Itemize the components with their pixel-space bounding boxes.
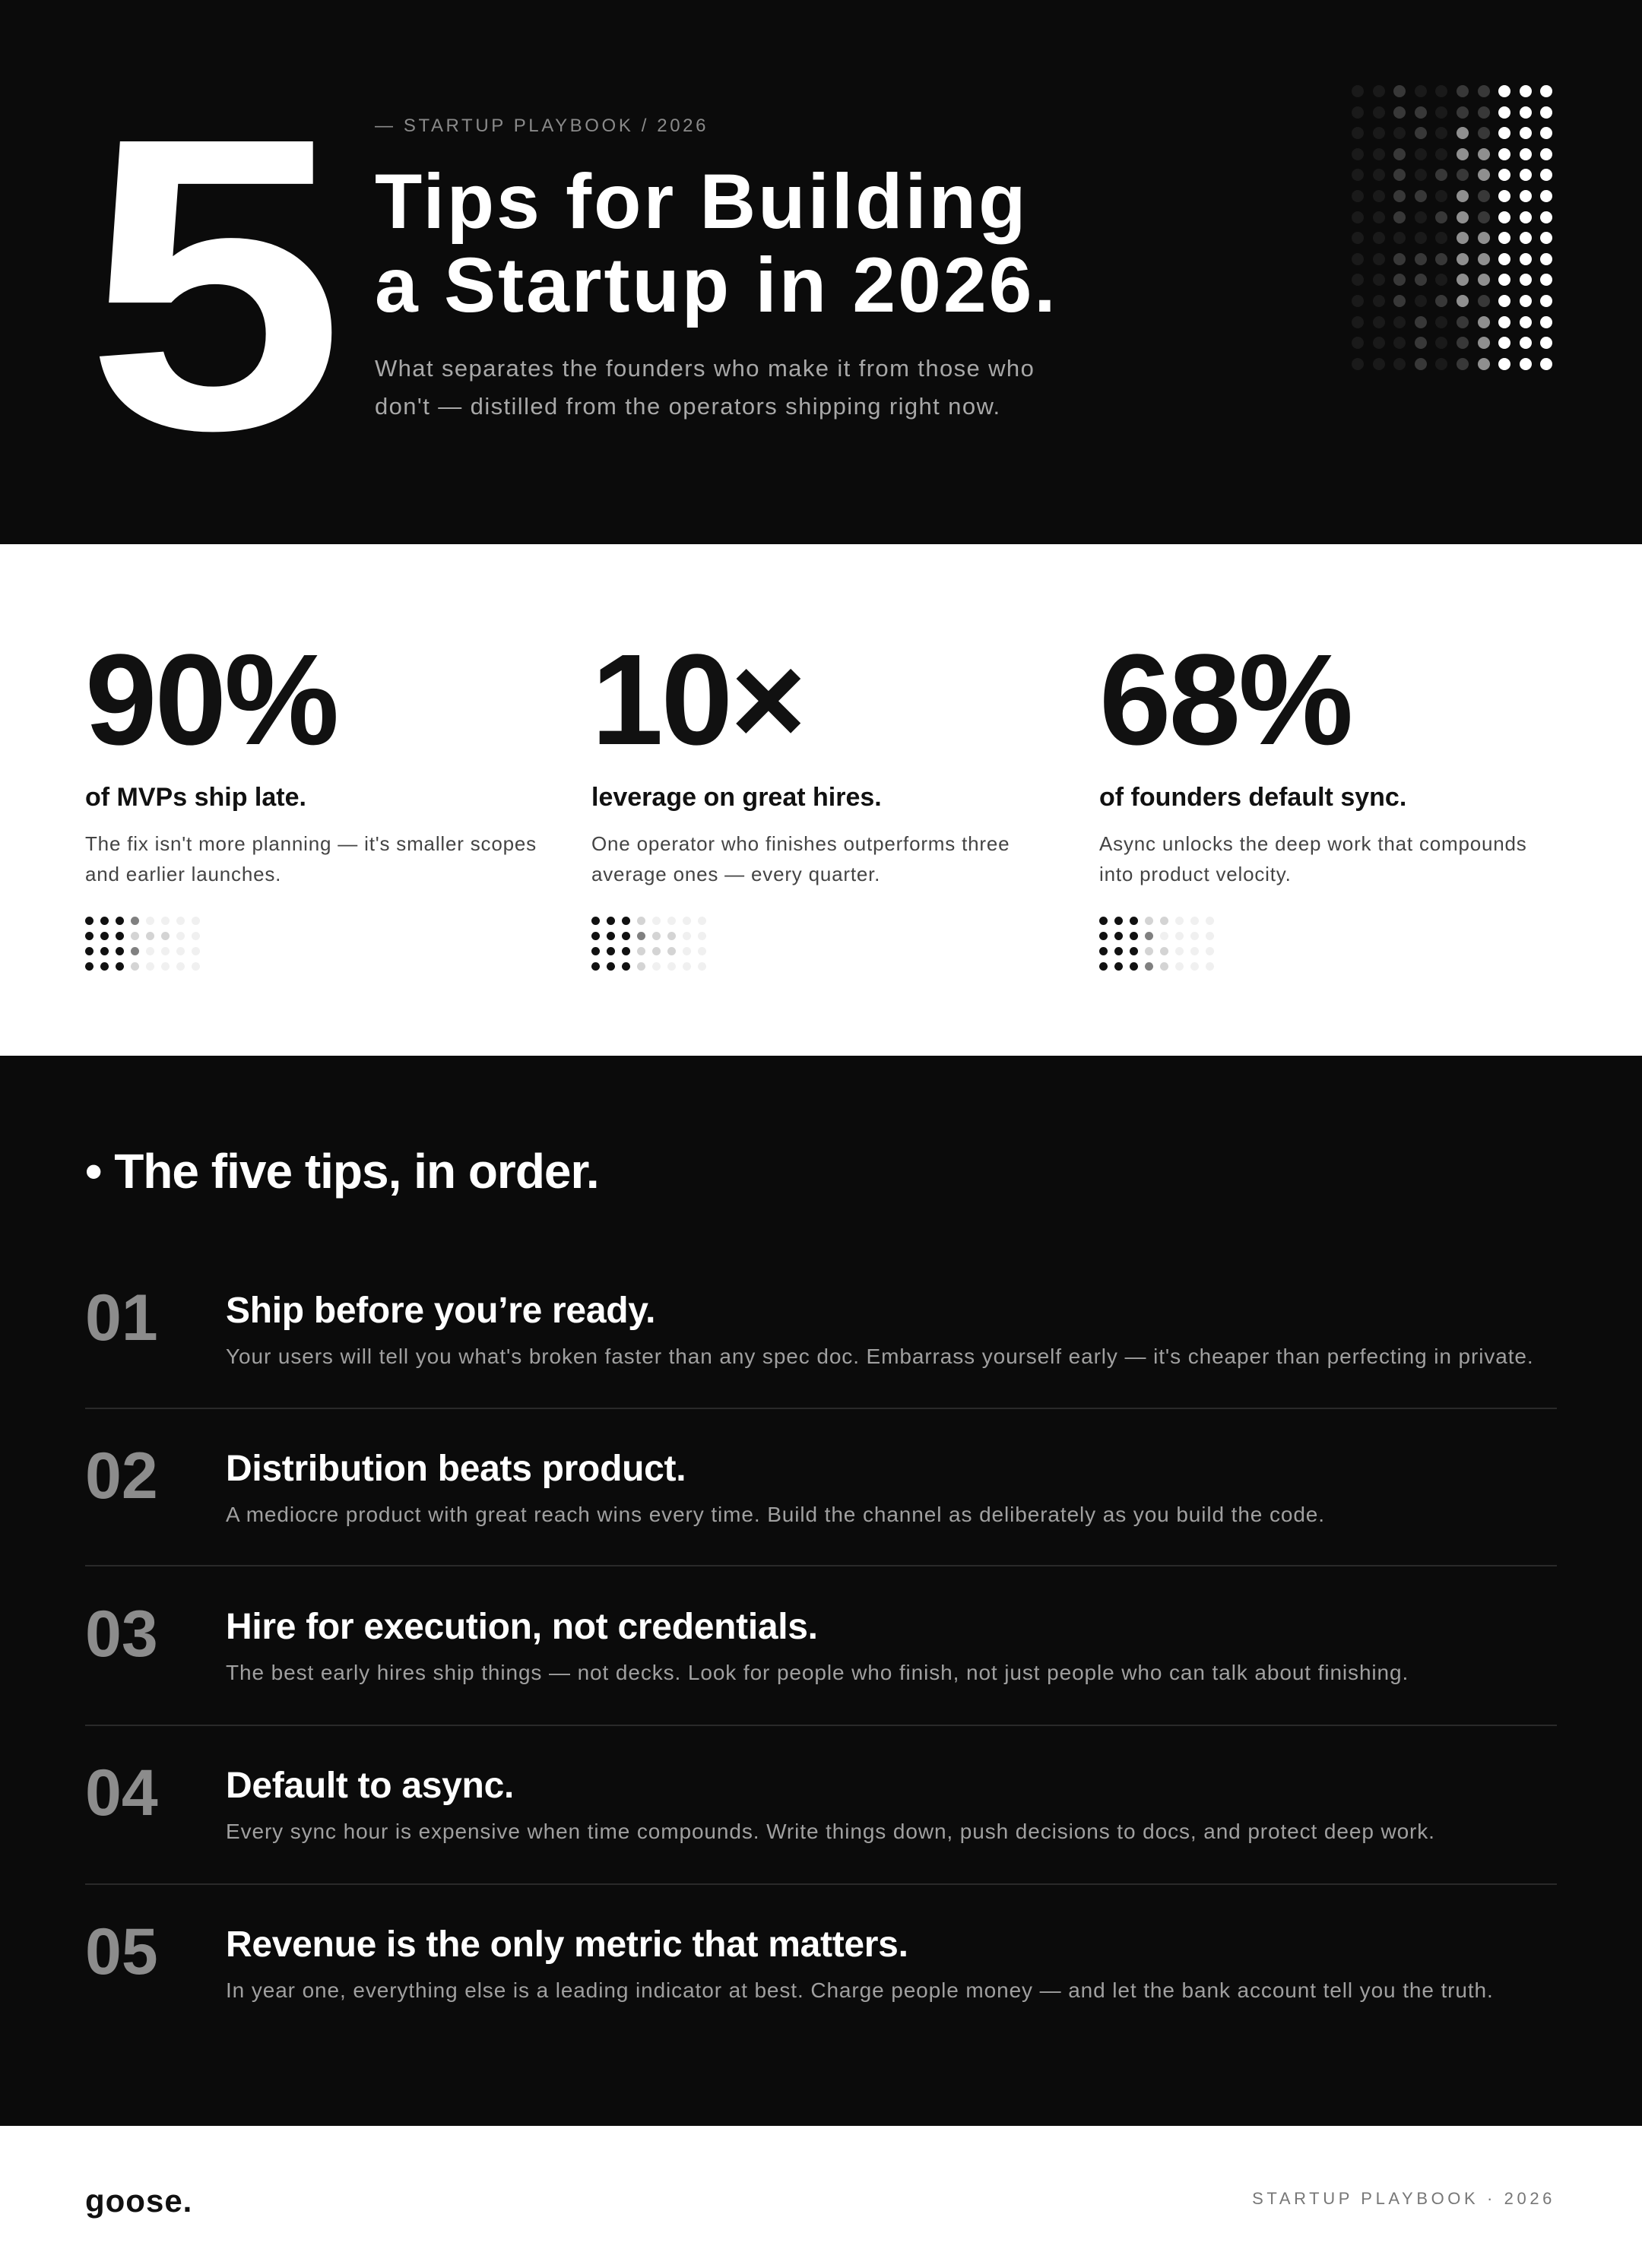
tip 02: Distribution beats product.: [226, 1449, 686, 1489]
tip 03: [85, 1598, 1409, 1684]
stat: 10x: leverage on great hires.: [591, 783, 882, 812]
tips panel: [0, 1056, 1642, 2126]
stat: 10x: average ones — every quarter.: [591, 863, 880, 885]
tip 04: 04: [85, 1756, 158, 1829]
tip 04: Default to async.: [226, 1766, 514, 1806]
tip 02: [85, 1440, 1325, 1526]
title: a Startup in 2026.: [375, 242, 1058, 328]
tip 04: Every sync hour is expensive when time compounds. Write things down, push decisions to docs, and protect deep work.: [226, 1820, 1435, 1843]
footer: [0, 2126, 1642, 2268]
stat: 90%: 90%: [85, 628, 337, 772]
stat: 68%: [1099, 628, 1527, 971]
tip 01: [85, 1281, 1534, 1368]
title: [375, 158, 1058, 328]
tip 05: [85, 1915, 1494, 2002]
tip 05: In year one, everything else is a leading indicator at best. Charge people money — and let the bank account tell you the truth.: [226, 1978, 1494, 2002]
tip 05: 05: [85, 1915, 158, 1988]
tip 02: 02: [85, 1440, 158, 1513]
logo: goose.: [85, 2183, 192, 2219]
stat: 10x: One operator who finishes outperforms three: [591, 832, 1010, 855]
tip 01: 01: [85, 1281, 158, 1354]
dot matrix decoration: [1352, 85, 1552, 370]
header panel: [0, 0, 1642, 544]
tip 03: The best early hires ship things — not decks. Look for people who finish, not just people who can talk about finishing.: [226, 1661, 1409, 1684]
eyebrow: — STARTUP PLAYBOOK / 2026: [375, 116, 708, 136]
subtitle: [375, 355, 1035, 420]
tip 03: 03: [85, 1598, 158, 1671]
stat: 90%: of MVPs ship late.: [85, 783, 306, 812]
stat: 10x: [591, 628, 1010, 971]
stat: 68%: 68%: [1099, 628, 1351, 772]
subtitle: What separates the founders who make it from those who: [375, 355, 1035, 382]
section heading: • The five tips, in order.: [85, 1144, 599, 1199]
stat: 90%: The fix isn't more planning — it's smaller scopes: [85, 832, 537, 855]
tip 01: Ship before you’re ready.: [226, 1291, 655, 1331]
tip 04: [85, 1756, 1435, 1843]
tip 02: A mediocre product with great reach wins every time. Build the channel as deliberately as you build the code.: [226, 1503, 1325, 1526]
stat: 90%: [85, 628, 537, 971]
subtitle: don't — distilled from the operators shipping right now.: [375, 393, 1001, 420]
tip 03: Hire for execution, not credentials.: [226, 1607, 818, 1647]
stat: 68%: of founders default sync.: [1099, 783, 1406, 812]
stat: 68%: Async unlocks the deep work that compounds: [1099, 832, 1527, 855]
stat: 10x: 10×: [591, 628, 804, 772]
stat: 68%: into product velocity.: [1099, 863, 1292, 885]
footer tag: STARTUP PLAYBOOK · 2026: [1252, 2189, 1555, 2208]
tip 01: Your users will tell you what's broken faster than any spec doc. Embarrass yourself early — it's cheaper than perfecting in private.: [226, 1345, 1534, 1368]
title: Tips for Building: [375, 158, 1028, 245]
stats panel: [0, 544, 1642, 1056]
tip 05: Revenue is the only metric that matters.: [226, 1924, 908, 1965]
stat: 90%: and earlier launches.: [85, 863, 281, 885]
big number 5: 5: [85, 52, 344, 517]
